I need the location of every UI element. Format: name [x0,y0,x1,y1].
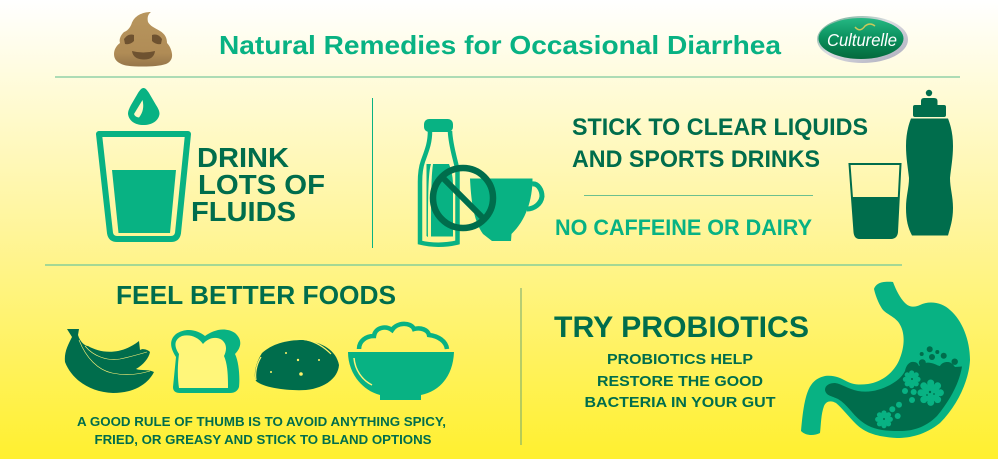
text: clear liquids heading: STICK TO CLEAR LIQUIDS [572,114,868,141]
icon: crossed-out bottle and cup [420,119,542,245]
icon: glass of water [99,134,188,239]
text: probiotics help: BACTERIA IN YOUR GUT [584,394,776,411]
icon: bread loaf [255,339,339,390]
heading: try probiotics: TRY PROBIOTICS [554,311,809,344]
text: probiotics help [584,351,776,411]
icon: glass of sports drink [850,164,900,239]
prohibition sign [433,168,493,228]
text: clear liquids heading [572,114,868,173]
text: rule of thumb: FRIED, OR GREASY AND STICK TO BLAND OPTIONS [94,432,432,447]
heading: feel better foods: FEEL BETTER FOODS [116,280,396,310]
bottle [420,119,458,245]
text: drink lots of fluids: DRINK [197,142,289,173]
title: Natural Remedies for Occasional Diarrhea [219,30,782,60]
text: drink lots of fluids: FLUIDS [191,196,296,227]
icon: smiling poop [114,12,172,66]
text: probiotics help: PROBIOTICS HELP [607,351,753,368]
icon: bananas [65,329,154,393]
text: no caffeine or dairy: NO CAFFEINE OR DAIRY [555,215,812,240]
logo: Culturelle: Culturelle [827,30,897,50]
icon: water drop [128,88,160,125]
icon: bowl of rice [348,324,454,400]
text: drink lots of fluids: LOTS OF [198,169,325,200]
text: drink lots of fluids [191,142,325,227]
icon: bread slice [171,330,240,393]
text: clear liquids heading: AND SPORTS DRINKS [572,146,820,173]
coffee cup [470,178,542,241]
icon: stomach with bacteria [801,282,970,438]
text: rule of thumb: A GOOD RULE OF THUMB IS TO AVOID ANYTHING SPICY, [77,414,446,429]
text: probiotics help: RESTORE THE GOOD [597,373,763,390]
text: rule of thumb [77,414,446,447]
logo: Culturelle [817,16,908,63]
icon: sports bottle [906,90,953,236]
